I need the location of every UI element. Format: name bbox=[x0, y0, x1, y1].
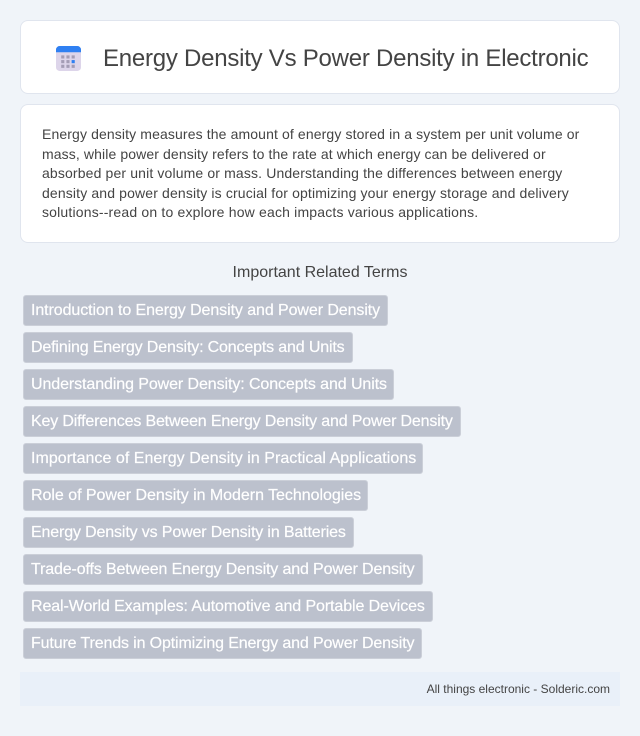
panel: description bbox=[20, 104, 620, 243]
tag 1: Introduction to Energy Density and Power Density bbox=[31, 302, 380, 319]
tag 10 bbox=[23, 628, 422, 659]
description text bbox=[42, 126, 580, 220]
description text: solutions--read on to explore how each impacts various applications. bbox=[42, 204, 478, 220]
tag 2 bbox=[23, 332, 352, 363]
footer text: All things electronic - Solderic.com bbox=[427, 682, 610, 696]
tag 4: Key Differences Between Energy Density and Power Density bbox=[31, 413, 453, 430]
icon: calendar bbox=[56, 46, 81, 71]
heading: related terms: Important Related Terms bbox=[233, 264, 407, 281]
title: Energy Density Vs Power Density in Electronic bbox=[103, 45, 588, 72]
tag 2: Defining Energy Density: Concepts and Units bbox=[31, 339, 344, 356]
tag 5: Importance of Energy Density in Practical Applications bbox=[31, 450, 416, 467]
tag 5 bbox=[23, 443, 423, 474]
description text: mass, while power density refers to the rate at which energy can be delivered or bbox=[42, 146, 546, 162]
tag 3: Understanding Power Density: Concepts and Units bbox=[31, 376, 387, 393]
tag 1 bbox=[23, 295, 388, 326]
tag 7: Energy Density vs Power Density in Batteries bbox=[31, 524, 346, 541]
tag 8: Trade-offs Between Energy Density and Power Density bbox=[31, 561, 414, 578]
tag 8 bbox=[23, 554, 423, 585]
tag 10: Future Trends in Optimizing Energy and Power Density bbox=[31, 635, 414, 652]
footer bbox=[20, 672, 620, 706]
tag 6: Role of Power Density in Modern Technologies bbox=[31, 487, 361, 504]
tag 7 bbox=[23, 517, 354, 548]
header card bbox=[20, 20, 620, 94]
tag 9 bbox=[23, 591, 432, 622]
tag 6 bbox=[23, 480, 368, 511]
description text: absorbed per unit volume or mass. Understanding the differences between energy bbox=[42, 165, 562, 181]
tag 9: Real-World Examples: Automotive and Portable Devices bbox=[31, 598, 425, 615]
description text: density and power density is crucial for optimizing your energy storage and delivery bbox=[42, 185, 569, 201]
tag 3 bbox=[23, 369, 394, 400]
list: related terms bbox=[23, 295, 461, 659]
description text: Energy density measures the amount of energy stored in a system per unit volume or bbox=[42, 126, 579, 142]
tag 4 bbox=[23, 406, 460, 437]
